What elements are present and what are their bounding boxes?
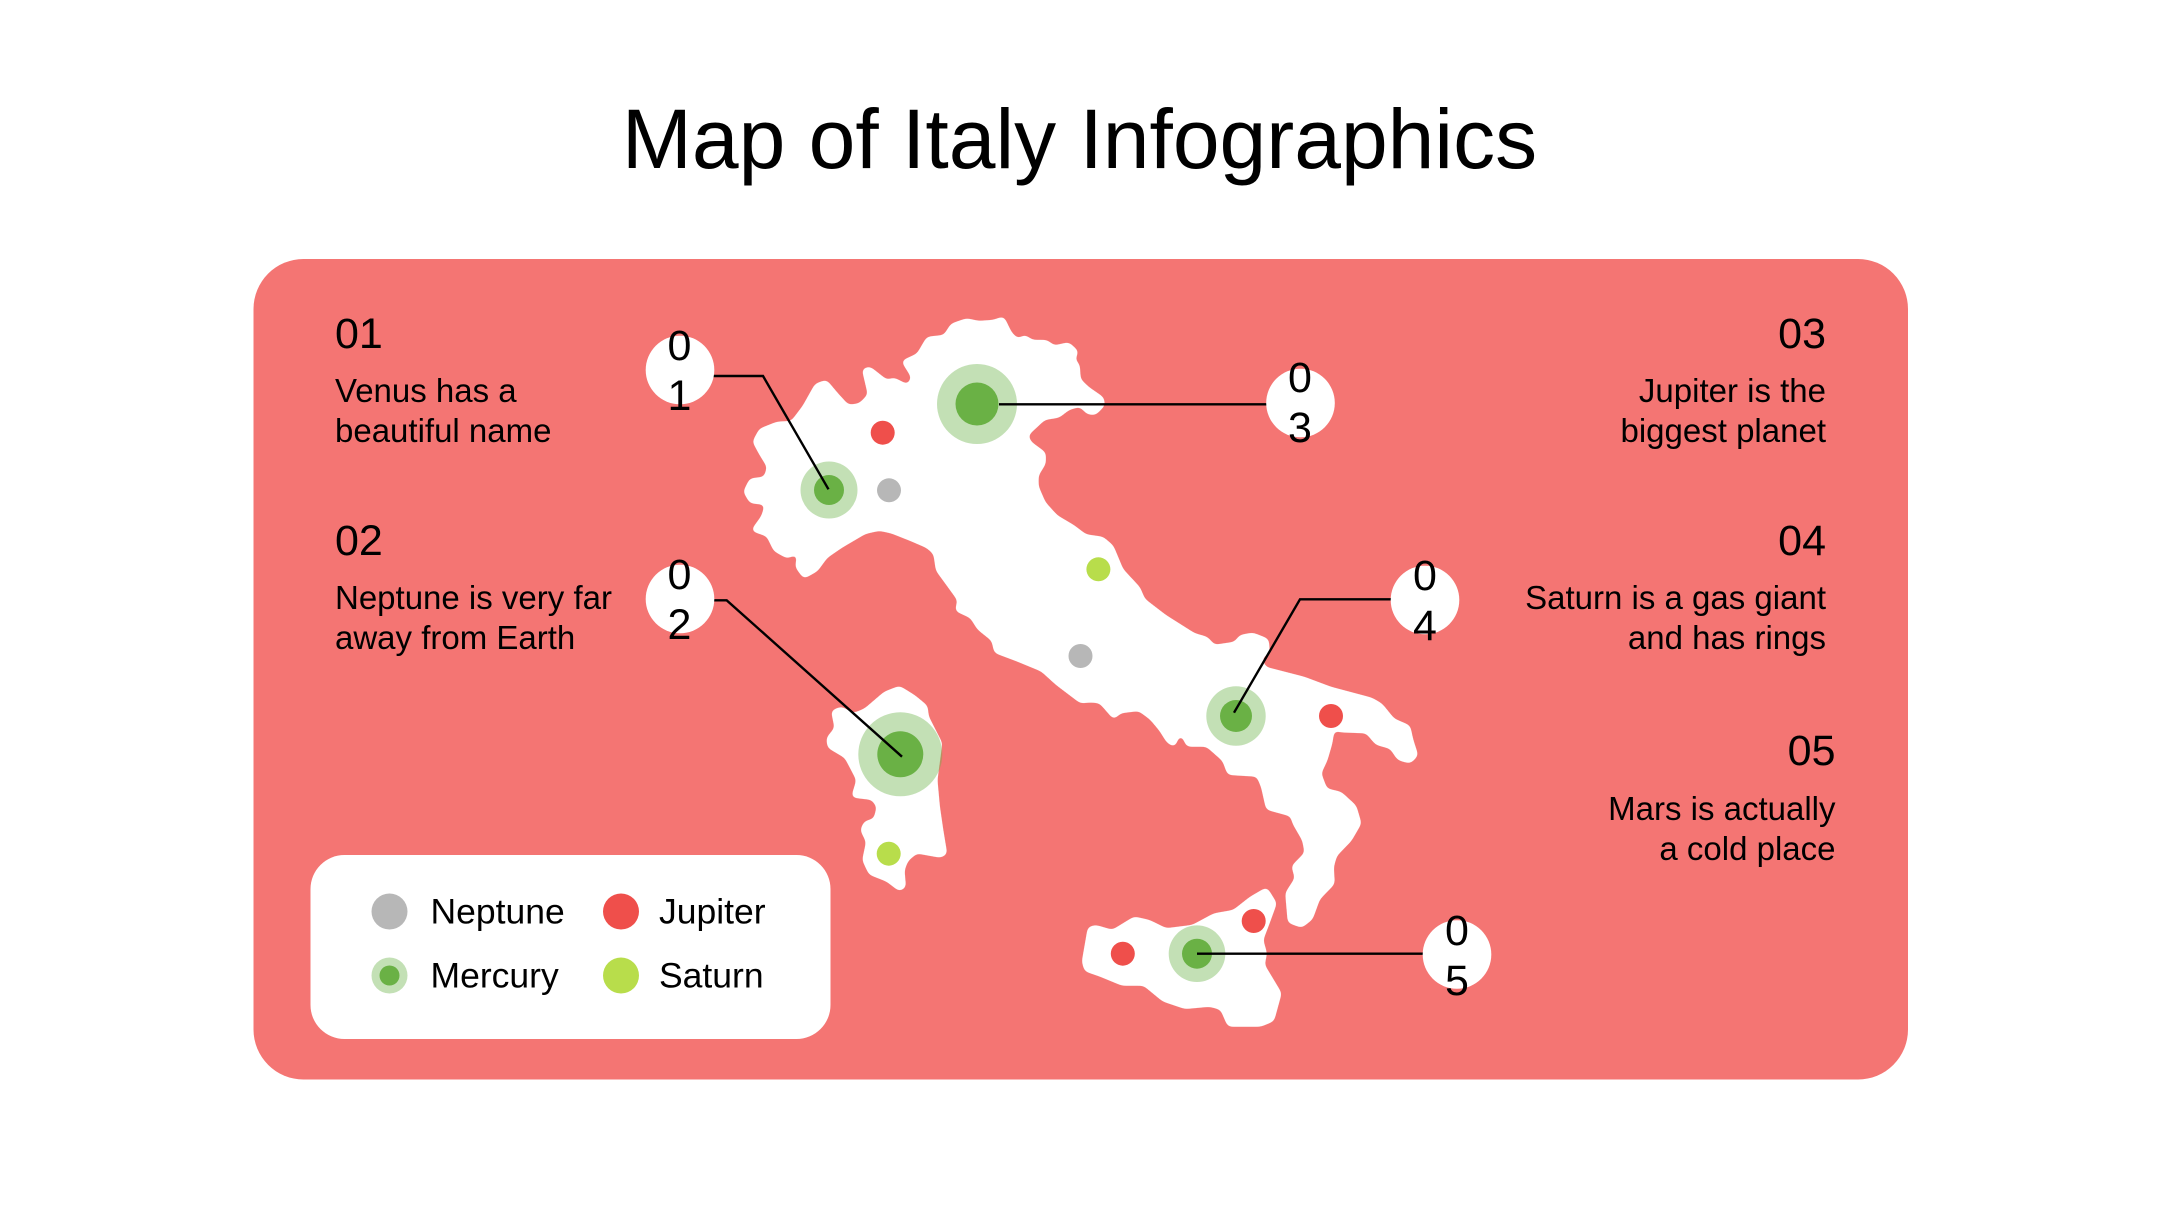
callout badge 01: 0 [668,322,691,370]
text block 05: 05 [1788,727,1836,775]
legend item: Neptune [372,892,565,932]
callout badge 03: 3 [1288,404,1312,452]
legend item: Jupiter: Jupiter [659,892,766,932]
marker: Saturn Sardinia [877,842,901,866]
connector 01 [713,376,828,489]
marker: Neptune north [877,478,901,502]
connector 03 [999,403,1270,405]
callout badge 04: 4 [1413,602,1437,650]
callout badge 03 [1266,354,1335,452]
text block 01 [335,310,551,449]
callout badge 01: 1 [668,372,691,420]
text block 02: Neptune is very far [335,579,612,616]
marker: Jupiter Sicily east [1242,909,1266,933]
callout badge 04: 0 [1413,552,1437,600]
Sicily [1084,889,1280,1025]
text block 04: Saturn is a gas giant [1525,579,1826,616]
text block 05 [1608,727,1836,867]
callout badge 04 [1391,552,1459,650]
Sardinia [828,688,945,889]
callout badge 01 [646,322,714,420]
text block 01: beautiful name [335,412,551,449]
callout badge 02 [646,551,714,649]
callout badge 02: 0 [668,551,691,599]
marker: Jupiter Sicily west [1111,942,1135,966]
connector 04 [1234,599,1392,713]
marker 03: Mercury [937,364,1017,444]
text block 04 [1525,517,1826,656]
callout badge 05 [1423,907,1491,1005]
text block 02 [335,517,612,656]
marker: Neptune center [1068,644,1092,668]
text block 01: 01 [335,310,383,358]
legend item: Saturn [603,956,764,996]
text block 05: a cold place [1659,830,1836,867]
legend item: Mercury: Mercury [430,956,559,996]
callout badge 05: 0 [1445,907,1469,955]
text block 03: 03 [1778,310,1826,358]
connector 05 [1197,953,1424,955]
text block 03: Jupiter is the [1639,372,1826,409]
callout badge 02: 2 [668,601,691,649]
legend [310,855,830,1039]
marker: Saturn center [1086,557,1110,581]
title: Map of Italy Infographics [622,92,1537,186]
panel: coral background [254,259,1908,1080]
map of Italy [745,318,1416,1025]
text block 01: Venus has a [335,372,517,409]
text block 03 [1620,310,1826,449]
connector 02 [713,600,902,757]
callout badge 03: 0 [1288,354,1312,402]
text block 02: away from Earth [335,619,575,656]
callout badge 05: 5 [1445,957,1469,1005]
text block 05: Mars is actually [1608,790,1836,827]
legend item: Neptune: Neptune [430,892,565,932]
text block 03: biggest planet [1620,412,1826,449]
text block 02: 02 [335,517,383,565]
marker 01: Mercury [800,462,858,518]
mainland Italy [745,318,1416,926]
legend item: Mercury [372,956,559,996]
legend box [310,855,830,1039]
text block 04: and has rings [1628,619,1826,656]
marker 05: Mercury [1169,925,1225,982]
marker 04: Mercury [1206,686,1266,746]
marker: Jupiter north [871,421,895,445]
legend item: Saturn: Saturn [659,956,764,996]
text block 04: 04 [1778,517,1826,565]
legend item: Jupiter [603,892,766,932]
marker 02: Mercury [858,712,942,796]
marker: Jupiter south [1319,704,1343,728]
